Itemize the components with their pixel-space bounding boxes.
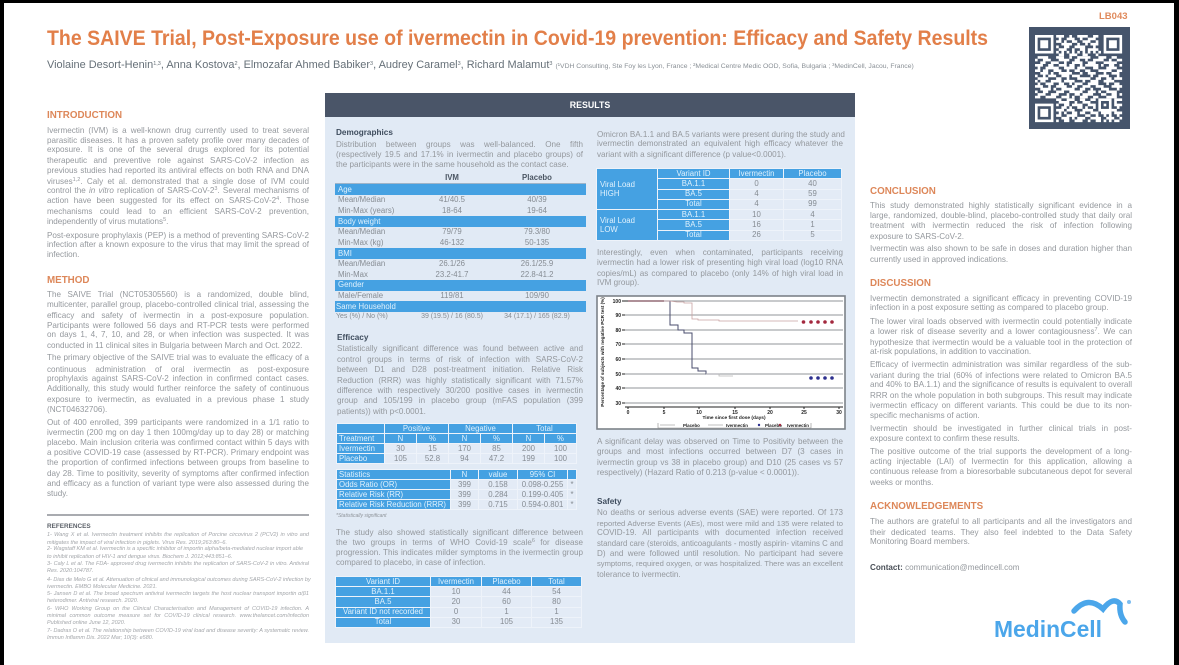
table: statistics: 0.158 (488, 480, 508, 488)
table: demographics: Min-Max (kg) (338, 238, 383, 247)
heading: references: REFERENCES (47, 523, 91, 530)
axes (622, 301, 843, 409)
text: method: Participants were followed 56 days and RT-PCR tests were performed (47, 321, 309, 330)
table: viral load: BA.1.1 (682, 210, 705, 219)
text: time to positivity: A significant delay was observed on Time to Positivity between the (597, 437, 843, 446)
text: safety: D) and were followed until resolution. No participant had severe (597, 549, 843, 558)
table: viral load: Placebo (798, 169, 827, 178)
table footnote: *Statistically significant (336, 513, 387, 519)
text: discussion (870, 294, 1132, 487)
table: infection results: Placebo (339, 454, 367, 462)
heading: introduction: INTRODUCTION (47, 110, 122, 121)
black frame right (1174, 0, 1179, 665)
text: viral load: copies/mL) as compared to placebo (only 14% of high viral load in (597, 269, 843, 278)
heading: discussion: DISCUSSION (870, 278, 931, 289)
text: discussion: RRR on the whole population in both subgroups. This result may indicate (870, 391, 1132, 400)
table: statistics: Relative Risk (RR) (339, 490, 403, 498)
table: viral load: Total (685, 199, 702, 208)
y axis labels: 30 (615, 401, 621, 407)
table: variants: 80 (552, 597, 561, 606)
table: demographics: 79.3/80 (524, 227, 550, 236)
table: demographics (335, 173, 586, 320)
panel: results (325, 93, 855, 643)
text: references: to inhibit replication of HIV-1 and dengue virus. Biochem J. 2012;443:851–6. (47, 554, 232, 560)
table: variants: Placebo (492, 577, 521, 586)
text: introduction: previous studies had reported its antiviral effects on both RNA and DNA (47, 166, 309, 175)
table: demographics: Yes (%) / No (%) (336, 313, 388, 320)
text: WHO scale: progression. This indicates milder symptoms in the ivermectin group (336, 548, 583, 557)
heading: conclusion: CONCLUSION (870, 186, 936, 197)
logo: MedinCell (994, 598, 1131, 640)
table: viral load (596, 168, 842, 241)
text: method: The primary objective of the SAIVE trial was to evaluate the efficacy of a (47, 353, 309, 362)
y axis labels: 100 (613, 299, 621, 305)
text: references: 2- Wagstaff KM et al. Ivermectin is a specific inhibitor of importin alpha/beta-mediated nuclear import able (47, 546, 303, 552)
table: variants: 60 (502, 597, 511, 606)
text: acknowledgements: The authors are grateful to all participants and all the investigators and (870, 517, 1132, 526)
text: method: on days 1, 4, 7, 10, and 28, or when infection was suspected. It was (47, 330, 309, 339)
table: demographics: Male/Female (338, 291, 383, 300)
text: introduction: infection after a known exposure to the virus that may limit the spread of (47, 240, 309, 249)
text: acknowledgements (870, 517, 1132, 546)
table: demographics: Gender (338, 280, 364, 289)
text: discussion: The positive outcome of the trial supports the development of a long- (870, 447, 1132, 456)
table: statistics (336, 469, 577, 510)
text: method: placebo. Main inclusion criteria was confirmed contact within 5 days with (47, 438, 309, 447)
text: demographics (336, 140, 583, 169)
text: method: multicenter, parallel group, placebo-controlled clinical trial, assessing the (47, 300, 309, 309)
x axis labels: 15 (732, 410, 738, 416)
text: viral load: ivermectin had a lower risk of presenting high viral load (log10 RNA (597, 258, 843, 267)
text: introduction: exposure. It is one of the several drugs explored for its potential (47, 145, 309, 154)
table: infection results: 94 (460, 454, 469, 462)
table: infection results: Treatment (339, 434, 374, 442)
text: discussion: at-risk populations, in addition to vaccination. (870, 347, 1031, 356)
text: method: continuous administration of oral ivermectin as post-exposure (47, 365, 309, 374)
y axis labels: 90 (615, 313, 621, 319)
table: viral load: Viral Load (600, 216, 635, 225)
text: method: (NCT04632706). (47, 405, 107, 414)
table: viral load: 26 (752, 230, 761, 239)
table: demographics: Mean/Median (338, 195, 385, 204)
text: introduction: therapeutic and preventive role against SARS-CoV-2 infection as (47, 156, 309, 165)
table: variants: BA.5 (375, 597, 391, 606)
table: variants: Variant ID (366, 577, 400, 586)
text: conclusion: large, randomized, double-blind, placebo-controlled study that daily oral (870, 211, 1132, 220)
title: The SAIVE Trial, Post-Exposure use of ivermectin in Covid-19 prevention: Efficacy and Safety Results (47, 27, 988, 50)
text: discussion: The lower viral loads observed with ivermectin could potentially indicate (870, 317, 1132, 326)
table: infection results: Ivermectin (339, 444, 375, 452)
text: references: 6- WHO Working Group on the Clinical Characterisation and Management of COVID-19 infection. A (47, 606, 309, 612)
x axis labels: 5 (663, 410, 666, 416)
text: method: prophylaxis against SARS-CoV-2 infection in confirmed contact cases. (47, 374, 309, 383)
text: omicron variants: Omicron BA.1.1 and BA.5 variants were present during the study and (597, 130, 845, 139)
text: introduction: mechanisms could lead to an efficient SARS-CoV-2 prevention, (47, 207, 309, 216)
table: viral load: HIGH (600, 189, 620, 198)
heading: demographics: Demographics (336, 128, 393, 137)
table: infection results: 85 (492, 444, 501, 452)
table: variants: 105 (500, 617, 513, 626)
table: statistics: 0.594-0.801 (522, 500, 563, 508)
table: viral load: Total (685, 230, 702, 239)
table: demographics: 41/40.5 (439, 195, 465, 204)
table: variants: BA.1.1 (371, 587, 395, 596)
text: WHO scale: The study also showed statistically significant difference between (336, 528, 583, 537)
text: WHO scale: compared to placebo, in case of infection. (336, 558, 485, 567)
text: discussion: specific mechanisms of action. (870, 411, 980, 420)
text: time to positivity: respectively) (Hazard Ratio of 0.213 (p-value < 0.0001)). (597, 468, 799, 477)
text: method: exposure to ivermectin, as evaluated in a previous phase 1 study (47, 395, 309, 404)
chart legend: Ivermectin (787, 423, 809, 428)
text: introduction: action have been suggested for its effect on SARS-CoV-24. Those (47, 196, 309, 205)
text: efficacy: control groups in terms of risk of infection with SARS-CoV-2 (337, 355, 583, 364)
table: statistics: 399 (458, 500, 471, 508)
text: discussion: hypothesize that ivermectin would be a valuable tool in the protection of (870, 338, 1132, 347)
table: viral load: BA.5 (685, 220, 702, 229)
table: viral load: 4 (754, 199, 759, 208)
table: statistics: Relative Risk Reduction (RRR) (339, 500, 446, 508)
table: infection results: 100 (554, 454, 567, 462)
text: acknowledgements: Monitoring Board members. (870, 537, 970, 546)
x axis labels: 10 (696, 410, 702, 416)
authors: Violaine Desort-Henin1,3, Anna Kostova2, Elmozafar Ahmed Babiker3, Audrey Caramel3, Richard Malamut3 (¹VDH Consulting, Ste Foy les Lyon, France ; ²Medical Centre Medic OOD, Sofia, Bulgaria ; ³MedinCell, Jacou, France) (47, 59, 914, 71)
chart legend: Ivermectin (726, 423, 748, 428)
table: infection results: 105 (394, 454, 407, 462)
y axis gridlines (625, 301, 843, 403)
text: method: ivermectin (200 mg on day 1 then 100mg/day up to day 28) or matching (47, 428, 309, 437)
table: demographics: Min-Max (years) (338, 206, 394, 215)
text: conclusion: exposure to SARS-CoV-2. (870, 232, 964, 241)
table: demographics: 26.1/26 (439, 259, 465, 268)
table: infection results: 200 (522, 444, 535, 452)
table: infection results: % (557, 434, 564, 442)
text: references: 4- Dias de Melo G et al. Attenuation of clinical and immunological outcomes during SARS-CoV-2 infection by (47, 577, 311, 583)
text: discussion: variant during the trial (60% of infections were related to Omicron BA.5 (870, 371, 1132, 380)
table: variants: 20 (452, 597, 460, 606)
text: safety: No deaths or serious adverse events (SAE) were reported. Of 173 (597, 508, 843, 517)
text: introduction: parasitic diseases. It has a proven safety profile over many decades of (47, 136, 309, 145)
text: method: Additionally, this study would further reinforce the safety of continuous (47, 384, 309, 393)
table: statistics: Odds Ratio (OR) (339, 480, 397, 488)
table: infection results: 100 (554, 444, 567, 452)
table: viral load: LOW (600, 225, 618, 234)
table: infection results: N (462, 434, 467, 442)
text: references: 3- Caly L et al. The FDA- approved drug ivermectin inhibits the replication of SARS-CoV-2 in vitro. Antiviral (47, 561, 309, 567)
text: references: Res. 2020:104787. (47, 568, 93, 574)
chart legend: Placebo (765, 423, 782, 428)
table: infection results: 170 (458, 444, 471, 452)
icon: QR code (1029, 27, 1130, 129)
text: safety: standard care (steroids, anticoagulants - mostly aspirin- vitamins C and (597, 539, 843, 548)
text: viral load (597, 248, 843, 287)
text: method: The SAIVE Trial (NCT05305560) is a randomized, double blind, (47, 290, 309, 299)
table: variants: 1 (554, 607, 559, 616)
chart legend (658, 423, 811, 428)
table: infection results: 15 (428, 444, 437, 452)
text: demographics: (respectively 19.5 and 17.1% in ivermectin and placebo groups) of (336, 150, 583, 159)
text: omicron variants (597, 130, 845, 159)
table: viral load: 16 (752, 220, 761, 229)
table: statistics: 399 (458, 480, 471, 488)
table: infection results: 47.2 (489, 454, 504, 462)
table: viral load: Ivermectin (739, 169, 774, 178)
text: conclusion: currently used in approved indications. (870, 255, 1008, 264)
x axis labels: 20 (767, 410, 773, 416)
text: conclusion: Ivermectin was also shown to be safe in doses and duration higher than (870, 244, 1132, 253)
table: viral load: 4 (754, 189, 759, 198)
heading: efficacy: Efficacy (337, 333, 368, 342)
y axis labels: 70 (615, 342, 621, 348)
text: references: minimal common outcome measure set for COVID-19 clinical research. www.thelancet.com/infection (47, 613, 309, 619)
table: demographics: Min-Max (338, 270, 368, 279)
chart: time to positivity (596, 295, 846, 430)
text: discussion: acting injectable (LAI) of Ivermectin for this application, allowing a (870, 457, 1132, 466)
table: viral load: 4 (810, 210, 815, 219)
table: demographics: Same Household (336, 302, 396, 311)
text: references: mitigates the impact of viral infection in piglets. Virus Res. 2019;263:80–6. (47, 540, 227, 546)
table: infection results: 30 (396, 444, 405, 452)
text: efficacy: Statistically significant difference was found between active and (337, 344, 583, 353)
text: conclusion (870, 201, 1132, 264)
text: omicron variants: ivermectin demonstrated an equivalent high efficacy whatever the (597, 139, 843, 148)
table: variants: 44 (502, 587, 511, 596)
table: variants: Variant ID not recorded (343, 607, 423, 616)
table: variants: 1 (504, 607, 509, 616)
text: demographics: Distribution between groups was well-balanced. One fifth (336, 140, 583, 149)
chart legend: Placebo (683, 423, 700, 428)
table: variants: 10 (452, 587, 460, 596)
text: discussion: Ivermectin demonstrated a significant efficacy in preventing COVID-19 (870, 294, 1132, 303)
text: method: study. (47, 489, 68, 498)
table: statistics: value (489, 470, 507, 478)
text: efficacy: group and 105/199 in placebo group (mFAS population (399 (337, 396, 583, 405)
text: safety: symptoms, required oxygen, or was hospitalized. There was an excellent (597, 559, 843, 568)
table: demographics: 26.1/25.9 (521, 259, 553, 268)
text: method: conducted in 11 clinical sites in Bulgaria between March and Oct. 2022. (47, 341, 302, 350)
table: demographics: 34 (17.1) / 165 (82.9) (504, 313, 570, 320)
table: demographics: 19-64 (527, 206, 547, 215)
text: acknowledgements: their dedicated teams. They also feel indebted to the Data Safety (870, 528, 1132, 537)
text: safety: reported Adverse Events (AEs), most were mild and 135 were related to (597, 519, 843, 528)
table: demographics: 109/90 (525, 291, 549, 300)
table: statistics: 0.715 (488, 500, 508, 508)
table: viral load: 0 (754, 179, 759, 188)
table: infection results: Total (536, 424, 553, 432)
y axis labels: 80 (615, 328, 621, 334)
results header: RESULTS (570, 100, 610, 110)
text: efficacy: between D1 and D28 post-treatment initiation. Relative Risk (337, 365, 583, 374)
text: time to positivity: groups and most infections occurred between D7 (3 cases in (597, 447, 843, 456)
table: variants: 30 (452, 617, 460, 626)
ivermectin curve (628, 301, 798, 321)
y axis labels: 50 (615, 372, 621, 378)
table: viral load: BA.5 (685, 189, 702, 198)
text: references: Immun Inflamm Dis. 2022 Mar; 10(3): e580. (47, 635, 153, 641)
contact: Contact: communication@medincell.com (870, 563, 1019, 572)
text: WHO scale: the two groups in terms of WHO Covid-19 scale6 for disease (336, 538, 583, 547)
table: statistics: Statistics (339, 470, 370, 478)
text: method: Out of 400 enrolled, 399 participants were randomized in a 1/1 ratio to (47, 418, 309, 427)
black frame left (0, 0, 4, 665)
text: demographics: the participants were in the same household as the contact case. (336, 160, 569, 169)
text: method: day 28. Time to positivity, severity of symptoms after confirmed infection (47, 469, 309, 478)
table: variants: 54 (552, 587, 561, 596)
table: demographics: 18-64 (442, 206, 462, 215)
y axis title: Percentage of subjects with negative PCR test (%) (600, 297, 605, 407)
table: variants: Total (375, 617, 391, 626)
text: discussion: weeks or months. (870, 478, 933, 487)
table: variants: 135 (550, 617, 563, 626)
results header (325, 93, 855, 117)
table: viral load: 10 (752, 210, 761, 219)
text: time to positivity (597, 437, 843, 477)
table: infection results: Positive (403, 424, 430, 432)
table: statistics: * (570, 490, 574, 498)
text: discussion: exposure context to confirm these results. (870, 434, 1020, 443)
text: discussion: a lower risk of disease severity and a lower contagiousness7. We can (870, 327, 1132, 336)
table: viral load: 59 (808, 189, 817, 198)
x axis labels (627, 410, 842, 416)
heading: acknowledgements: ACKNOWLEDGEMENTS (870, 501, 983, 512)
table: statistics: * (570, 500, 574, 508)
table: viral load: 99 (808, 199, 817, 208)
text: method (47, 290, 309, 498)
text: method: efficacy and safety of ivermectin in a post-exposure population. (47, 311, 309, 320)
x axis title: Time since first dose (days) (702, 415, 766, 421)
text: efficacy: difference with respectively 30/200 positive cases in ivermectin (337, 386, 583, 395)
table: demographics: Body weight (338, 217, 380, 226)
text: time to positivity: ivermectin group vs 38 in placebo group) and D10 (25 cases vs 57 (597, 458, 843, 467)
text: introduction: Post-exposure prophylaxis (PEP) is a method of preventing SARS-CoV-2 (47, 231, 309, 240)
table: viral load: 1 (810, 220, 815, 229)
table: infection results: 52.8 (425, 454, 440, 462)
text: safety (597, 508, 843, 579)
text: references: 1- Wang X et al. Ivermectin treatment inhibits the replication of Porcine circovirus 2 (PCV2) in vitro and (47, 532, 309, 538)
text: method: a positive COVID-19 case (assessed by RT-PCR). Primary endpoint was (47, 448, 309, 457)
text: references: Published online June 12, 2020. (47, 620, 125, 626)
text: references: 5- Jansen D et al. The broad spectrum antiviral ivermectin targets the host nuclear transport importin α/β1 (47, 591, 309, 597)
heading: method: METHOD (47, 275, 89, 286)
table: demographics: 79/79 (442, 227, 462, 236)
text: introduction (47, 126, 309, 259)
text: conclusion: treatment with ivermectin reduced the risk of infection following (870, 221, 1132, 230)
text: safety: COVID-19. All participants with documented infection received (597, 528, 843, 537)
x axis labels: 25 (801, 410, 807, 416)
table: infection results (336, 423, 577, 464)
text: conclusion: This study demonstrated highly statistically significant evidence in a (870, 201, 1132, 210)
table: infection results: 199 (522, 454, 535, 462)
y axis labels: 40 (615, 386, 621, 392)
table: statistics: N (462, 470, 467, 478)
table: demographics: 23.2-41.7 (436, 270, 468, 279)
x axis labels: 0 (627, 410, 630, 416)
text: safety: tolerance to ivermectin. (597, 570, 681, 579)
text: discussion: ivermectin efficacy on different variants. This could be due to its non- (870, 401, 1132, 410)
table: viral load: Viral Load (600, 180, 635, 189)
table: infection results: N (398, 434, 403, 442)
table: statistics: * (570, 480, 574, 488)
text: references: ivermectin. EMBO Molecular Medicine. 2021. (47, 584, 157, 590)
y axis labels: 60 (615, 357, 621, 363)
text: omicron variants: variant with a significant difference (p value<0.0001). (597, 150, 786, 159)
text: introduction: independently of virus mutations5. (47, 217, 168, 226)
table: statistics: 0.199-0.405 (522, 490, 563, 498)
table: demographics: Placebo (522, 173, 552, 182)
table: demographics: BMI (338, 248, 352, 258)
text: discussion: continuous release from a bioresorbable subcutaneous depot for several (870, 467, 1132, 476)
placebo curve (628, 301, 719, 374)
poster number: LB043 (1099, 11, 1128, 22)
placebo markers (809, 376, 834, 380)
table: viral load: Variant ID (676, 169, 711, 178)
table: demographics: 22.8-41.2 (521, 270, 553, 279)
table: demographics: 40/39 (527, 195, 547, 204)
text: efficacy: Reduction (RRR) was highly statistically significant with 71.57% (337, 376, 583, 385)
heading: safety: Safety (597, 497, 622, 506)
table: infection results: % (429, 434, 436, 442)
table: infection results: Negative (465, 424, 496, 432)
table: demographics: IVM (445, 173, 459, 182)
black frame top (0, 0, 1179, 3)
table: demographics: 39 (19.5) / 16 (80.5) (421, 313, 483, 320)
text: discussion: Efficacy of ivermectin administration was similar regardless of the sub- (870, 360, 1132, 369)
table: statistics: 0.098-0.255 (522, 480, 563, 488)
table: demographics: Age (338, 185, 352, 194)
text: discussion: Ivermectin should be investigated in further clinical trials in post- (870, 424, 1132, 433)
table: statistics: 95% CI (530, 470, 555, 478)
table: demographics: 46-132 (440, 238, 464, 247)
table: viral load: BA.1.1 (682, 179, 705, 188)
text: introduction: control the in vitro replication of SARS-CoV-23. Several mechanisms of (47, 186, 309, 195)
text: viral load: IVM group). (597, 278, 639, 287)
text: introduction: Ivermectin (IVM) is a well-known drug currently used to treat several (47, 126, 309, 135)
table: viral load: 40 (808, 179, 817, 188)
table: infection results: % (493, 434, 500, 442)
text: WHO scale (336, 528, 583, 567)
text: references (47, 532, 311, 641)
text: efficacy (337, 344, 583, 416)
text: efficacy: patients)) with p<0.0001. (337, 407, 426, 416)
table: demographics: Mean/Median (338, 259, 385, 268)
text: method: and efficacy as a function of variant type were also assessed during the (47, 479, 309, 488)
table: variants (335, 576, 582, 628)
table: variants: Total (548, 577, 565, 586)
table: demographics: 50-135 (525, 238, 549, 247)
ivermectin markers (802, 320, 834, 324)
text: references: heterodimer. Antiviral research. 2020. (47, 598, 138, 604)
table: demographics: 119/81 (440, 291, 464, 300)
table: infection results: N (526, 434, 531, 442)
text: introduction: viruses1,2. Caly et al. demonstrated that a single dose of IVM could (47, 177, 309, 186)
table: statistics: 0.284 (488, 490, 508, 498)
table: demographics: Mean/Median (338, 227, 385, 236)
text: introduction: infection. (47, 250, 79, 259)
text: discussion: infection in a post exposure setting as compared to placebo group. (870, 303, 1108, 312)
table: variants: Ivermectin (438, 577, 474, 586)
table: variants: 0 (454, 607, 458, 616)
text: references: 7- Dadras O et al. The relationship between COVID-19 viral load and disease severity: A systematic review. (47, 628, 309, 634)
x axis labels: 30 (836, 410, 842, 416)
text: discussion: and 40% to BA.1.1) and the significance of results is equivalent to overall (870, 380, 1132, 389)
table: viral load: 5 (810, 230, 815, 239)
text: viral load: Interestingly, even when contaminated, participants receiving (597, 248, 843, 257)
table: statistics: 399 (458, 490, 471, 498)
text: method: the proportion of confirmed infections between groups from baseline to (47, 458, 309, 467)
y axis labels (613, 299, 621, 407)
